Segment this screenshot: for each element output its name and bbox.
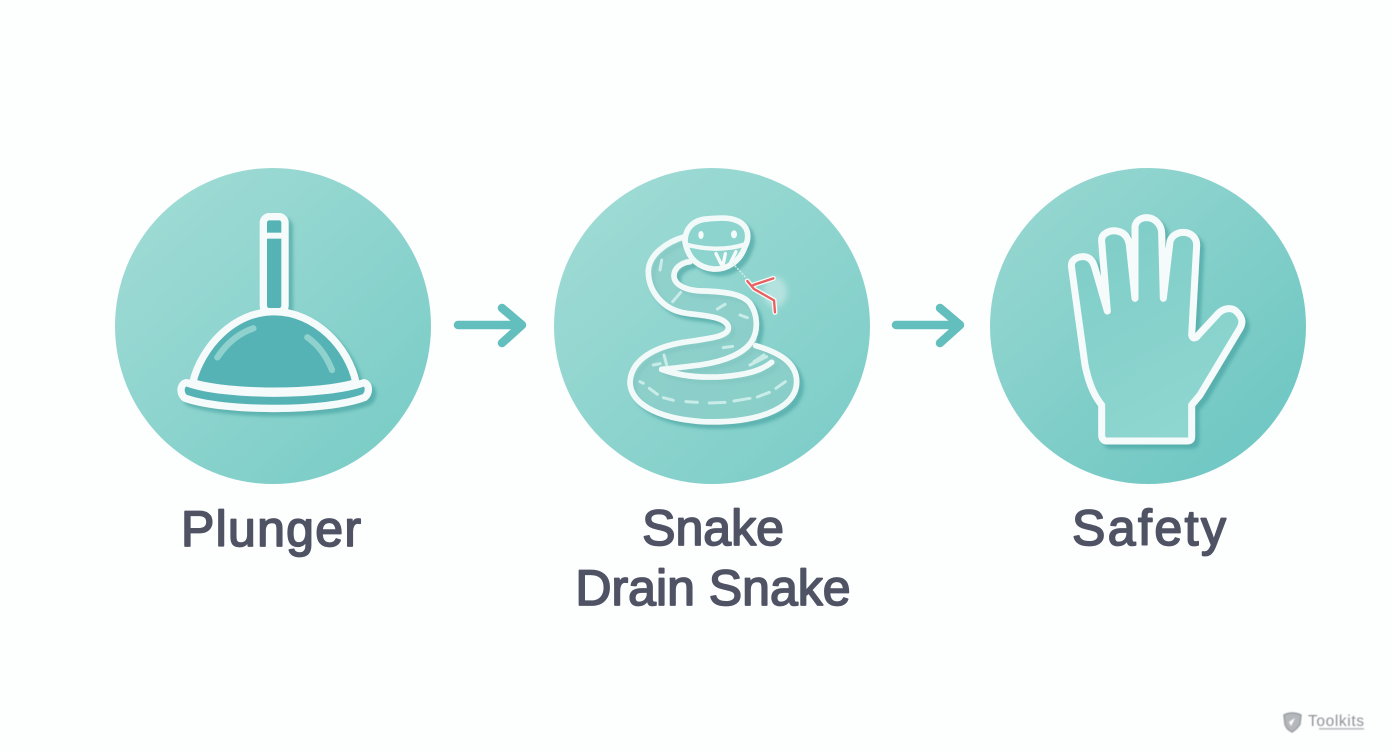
icon: shield	[1284, 713, 1301, 732]
label: Snake / Drain Snake: Snake	[642, 500, 784, 556]
label: Snake / Drain Snake	[575, 500, 851, 616]
icon: snake	[630, 218, 797, 422]
label: Plunger: Plunger	[181, 501, 361, 557]
snake belly markings	[640, 260, 785, 403]
arrow: snake to safety	[896, 308, 960, 343]
panel: safety step	[990, 168, 1306, 484]
panel: snake step	[554, 168, 870, 484]
panel: plunger step	[115, 168, 431, 484]
icon: plunger	[181, 217, 368, 408]
icon: safety glove	[1071, 218, 1242, 441]
tongue spark	[763, 277, 787, 308]
plunger circle	[115, 168, 431, 484]
snake circle	[554, 168, 870, 484]
icon: red tongue	[747, 278, 775, 312]
watermark: Toolkits	[1284, 713, 1364, 732]
arrow: plunger to snake	[458, 308, 522, 343]
safety circle	[990, 168, 1306, 484]
label: Safety: Safety	[1072, 500, 1226, 556]
watermark: Toolkits: Toolkits	[1308, 713, 1364, 730]
label: Snake / Drain Snake: Drain Snake	[575, 560, 851, 616]
